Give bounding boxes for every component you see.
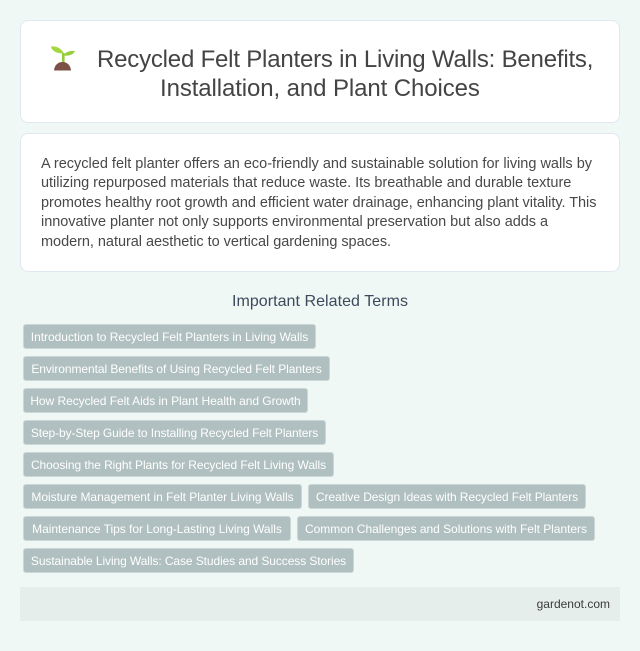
tag 6 — [23, 484, 302, 509]
title card — [20, 20, 620, 123]
tag 7: Creative Design Ideas with Recycled Felt Planters — [316, 490, 578, 504]
section heading: Important Related Terms — [232, 293, 408, 310]
description text: modern, natural aesthetic to vertical gardening spaces. — [41, 234, 391, 250]
tag list — [23, 324, 595, 573]
tag 7 — [308, 484, 586, 509]
tag 3 — [23, 388, 308, 413]
tag 1: Introduction to Recycled Felt Planters in Living Walls — [31, 330, 308, 344]
title — [97, 46, 593, 102]
tag 4: Step-by-Step Guide to Installing Recycled Felt Planters — [31, 426, 318, 440]
tag 6: Moisture Management in Felt Planter Living Walls — [31, 490, 294, 504]
footer bar — [20, 587, 620, 621]
footer source: gardenot.com — [537, 597, 610, 611]
tag 8: Maintenance Tips for Long-Lasting Living Walls — [32, 522, 282, 536]
tag 2 — [23, 356, 330, 381]
tag 1 — [23, 324, 316, 349]
tag 4 — [23, 420, 326, 445]
tag 3: How Recycled Felt Aids in Plant Health and Growth — [30, 394, 301, 408]
description text: promotes healthy root growth and efficient water drainage, enhancing plant vitality. This — [41, 194, 596, 210]
tag 10 — [23, 548, 354, 573]
title: Recycled Felt Planters in Living Walls: Benefits, — [97, 46, 593, 73]
description card — [20, 133, 620, 272]
description text — [41, 156, 596, 250]
tag 5 — [23, 452, 334, 477]
tag 5: Choosing the Right Plants for Recycled Felt Living Walls — [31, 458, 326, 472]
tag 9: Common Challenges and Solutions with Felt Planters — [305, 522, 587, 536]
icon: seedling — [51, 46, 75, 70]
description text: utilizing repurposed materials that reduce waste. Its breathable and durable texture — [41, 175, 571, 191]
tag 10: Sustainable Living Walls: Case Studies and Success Stories — [31, 554, 346, 568]
tag 9 — [297, 516, 595, 541]
description text: innovative planter not only supports environmental preservation but also adds a — [41, 214, 548, 230]
tag 2: Environmental Benefits of Using Recycled Felt Planters — [31, 362, 322, 376]
tag 8 — [23, 516, 291, 541]
title: Installation, and Plant Choices — [160, 75, 480, 102]
description text: A recycled felt planter offers an eco-friendly and sustainable solution for living walls by — [41, 156, 592, 172]
